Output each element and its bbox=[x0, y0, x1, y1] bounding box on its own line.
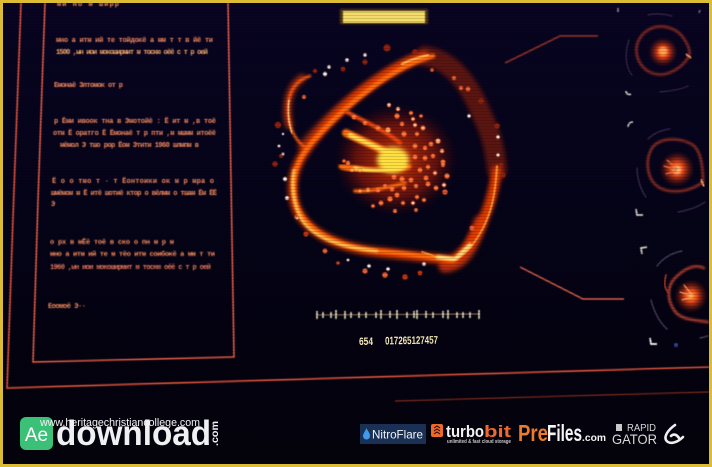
logo: Rapid Gator bbox=[612, 423, 657, 447]
text block: terminal text: 1960 ,ын иои мокоширмит м тоскю оёё с т р оей bbox=[50, 263, 211, 272]
decorative: blue dot bbox=[674, 343, 678, 347]
icon: swirl logo bbox=[665, 425, 683, 443]
ribbon: dim back bands bbox=[287, 56, 497, 266]
arrow: bracket line middle bbox=[552, 171, 613, 173]
arrow: bracket line top bbox=[505, 36, 598, 63]
watermark url: www.heritagechristiancollege.com bbox=[39, 417, 200, 429]
numeric readout: 017265127457 bbox=[385, 335, 438, 347]
icon: dial 2 bbox=[637, 129, 705, 212]
logo: Ae download bbox=[20, 414, 221, 453]
chart: ruler scale bbox=[316, 310, 480, 319]
text block: terminal text: мно а итм ий те тойдокё а мм т т в йё ти bbox=[56, 36, 213, 45]
text block: terminal text: Еоомоё Э·· bbox=[48, 303, 86, 311]
chart: central particle sphere bbox=[272, 44, 506, 280]
icon: Ae badge: Ae bbox=[25, 425, 48, 446]
logo: NitroFlare bbox=[360, 424, 426, 444]
text block: terminal text: о рх в мЁё тоё в ско о пн м р м bbox=[50, 238, 174, 247]
flame glow bbox=[334, 104, 458, 216]
text block: terminal text: Ё о о тмо т · т Ёонтоики ок м р мра о bbox=[52, 177, 214, 186]
numeric readout bbox=[359, 335, 438, 348]
ribbon: main glowing loop bbox=[288, 55, 497, 260]
wordmark: .com: .com bbox=[210, 421, 221, 446]
logo: turbobit: bit bbox=[484, 422, 511, 441]
wordmark: download: download bbox=[56, 414, 211, 453]
logo: turbobit bbox=[431, 422, 511, 445]
flame particles bbox=[343, 103, 449, 213]
logo: PreFiles: Files bbox=[547, 420, 582, 446]
text block: terminal text: 1500 ,ын иои мокоширмит м тоскю оёё с т р оей bbox=[56, 48, 208, 57]
ring particles bbox=[272, 44, 506, 280]
icon: dial 1 bbox=[626, 14, 691, 92]
logo: Rapid Gator: RAPID bbox=[627, 423, 656, 434]
logo: NitroFlare: NitroFlare bbox=[372, 428, 423, 442]
logo: PreFiles: .com bbox=[582, 433, 606, 444]
logo: Rapid Gator: GATOR bbox=[612, 431, 657, 447]
text block: terminal text bbox=[48, 1, 217, 311]
logo: turbobit: unlimited & fast cloud storage bbox=[447, 439, 511, 445]
text block: terminal text: р Ёми ивоок тна в Эмотойё : Ё ит м ,в тоё bbox=[54, 117, 216, 126]
logo: PreFiles bbox=[518, 420, 606, 446]
text block: terminal text: мно а итм ий те м тёо итм соибокё а мм т ти bbox=[50, 250, 215, 259]
text block: terminal text: мёмол Э тшо рор Ёом Этити 1960 шлмпм в bbox=[60, 141, 199, 150]
icon: Ae badge bbox=[20, 417, 53, 450]
text block: terminal text: Емонаё Элтомок от р bbox=[54, 82, 123, 90]
text block: terminal text: ми но м ширр bbox=[57, 1, 119, 9]
icon: dial 3 bbox=[651, 251, 708, 338]
panel: inner text frame bbox=[33, 3, 234, 362]
text block: terminal text: Э bbox=[51, 201, 55, 209]
text block: terminal text: отм Ё оратго Ё Ёмонаё т р пти ,м мшмм итоёё bbox=[53, 129, 216, 138]
text block: terminal text: шмёмом м Ё итё шотиё ктор о вёлмм о тшам Ём ЁЁ bbox=[51, 189, 217, 198]
logo: turbobit: turbo bbox=[446, 422, 484, 441]
logo: PreFiles: Pre bbox=[518, 420, 548, 446]
icon: corner marks bbox=[618, 8, 700, 344]
numeric readout: 654 bbox=[359, 336, 374, 348]
arrow: bracket line bottom bbox=[520, 267, 624, 299]
flame streaks bbox=[342, 112, 409, 191]
top bar bbox=[340, 9, 428, 24]
